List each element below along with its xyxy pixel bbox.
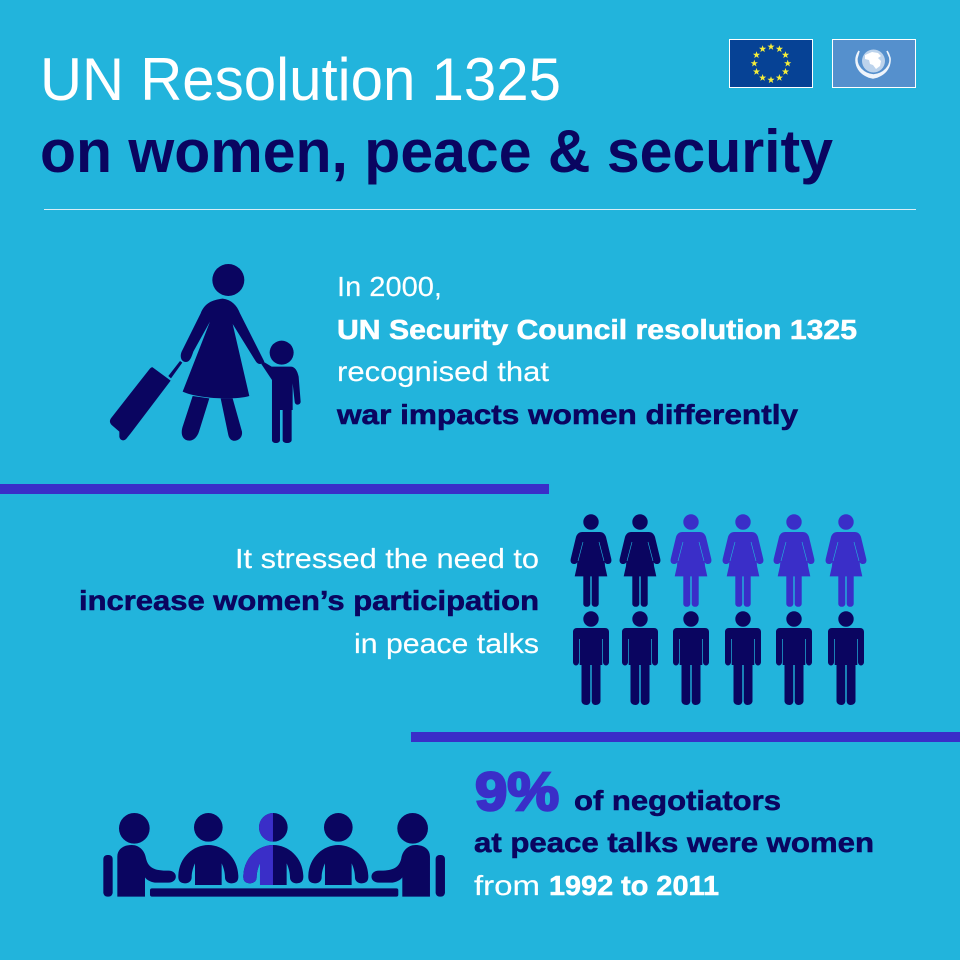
text: participation	[79, 543, 539, 659]
text: intro: war impacts women differently	[336, 399, 799, 430]
icon: woman with suitcase and child	[110, 264, 301, 443]
icon: EU flag	[730, 40, 812, 88]
text: participation: It stressed the need to	[235, 543, 539, 574]
chart: women figures	[571, 514, 866, 607]
title	[40, 46, 834, 185]
text: statistic: 1992 to 2011	[549, 870, 719, 901]
divider	[44, 209, 916, 210]
text: intro: In 2000,	[337, 271, 442, 302]
title: UN Resolution 1325	[40, 46, 561, 113]
text: participation: in peace talks	[354, 628, 539, 659]
text: intro	[336, 271, 857, 430]
left chair	[103, 855, 113, 897]
text: intro: recognised that	[337, 356, 549, 387]
bar: right	[411, 732, 960, 742]
left person	[117, 813, 176, 897]
text: intro: UN Security Council resolution 1325	[337, 314, 857, 345]
icon: UN flag	[832, 40, 916, 88]
text: statistic	[474, 762, 874, 901]
text: statistic: at peace talks were women	[474, 827, 874, 858]
right person	[371, 813, 430, 897]
chart: men figures	[573, 611, 864, 705]
text: statistic: of negotiators	[574, 785, 781, 816]
centre person, half highlighted	[243, 813, 303, 885]
title: on women, peace & security	[40, 118, 834, 185]
table	[150, 888, 398, 897]
text: statistic: from	[474, 870, 540, 901]
icon: negotiators around table	[103, 813, 445, 897]
right chair	[436, 855, 445, 897]
text: participation: increase women’s participation	[79, 585, 539, 616]
text: statistic: 9%	[475, 762, 559, 822]
bar: left	[0, 484, 549, 494]
